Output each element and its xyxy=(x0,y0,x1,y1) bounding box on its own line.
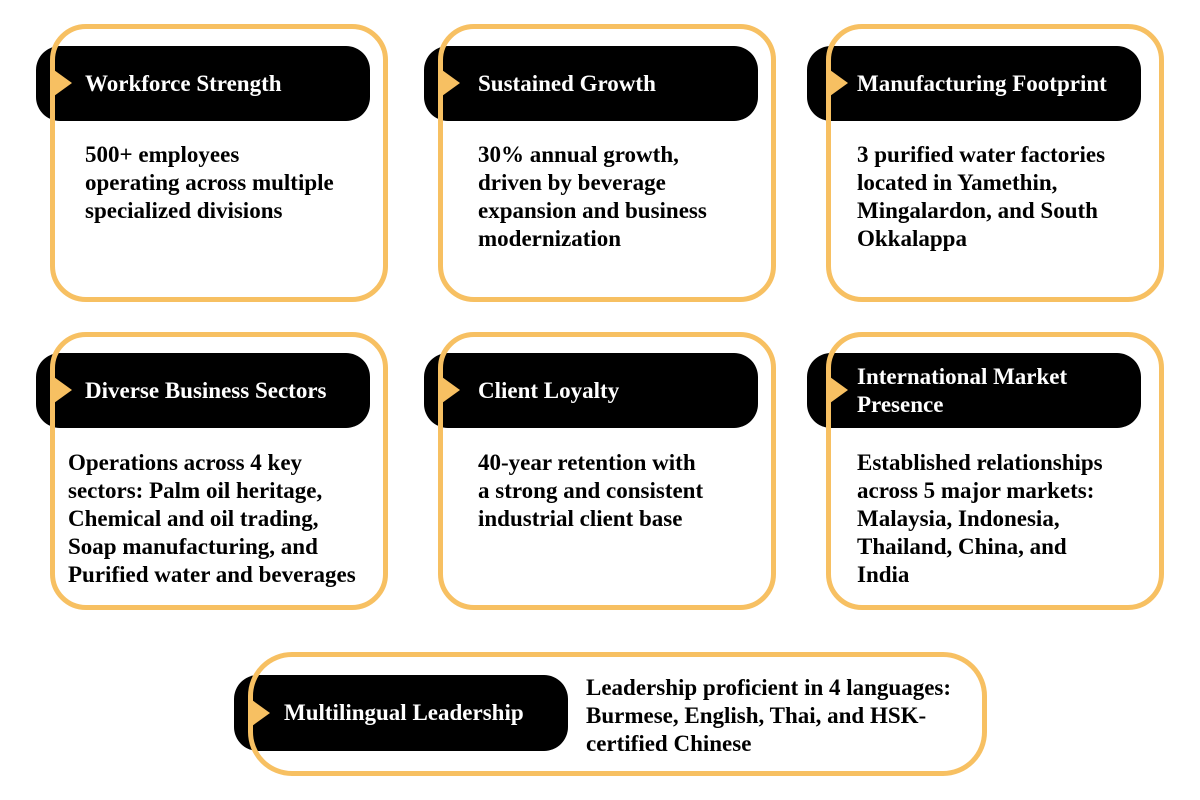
header: Diverse Business Sectors xyxy=(36,353,370,428)
text: markets: Thailand, China, and xyxy=(857,534,1067,559)
icon: notch xyxy=(54,377,72,403)
icon: notch xyxy=(830,70,848,96)
icon: notch xyxy=(442,377,460,403)
text: markets: India xyxy=(857,562,909,587)
text: markets xyxy=(857,450,1103,587)
border xyxy=(248,652,987,776)
text: workforce: 500+ employees xyxy=(85,142,239,167)
icon: notch xyxy=(830,377,848,403)
text: sectors: Purified water and beverages xyxy=(68,562,356,587)
card: Manufacturing Footprint xyxy=(807,24,1164,302)
text: sectors: Operations across 4 key xyxy=(68,450,302,475)
text: growth xyxy=(478,142,707,251)
border xyxy=(50,24,388,302)
text: growth: driven by beverage xyxy=(478,170,666,195)
card: Client Loyalty xyxy=(424,332,776,610)
text: factories: Mingalardon, and South xyxy=(857,198,1098,223)
header: International Market Presence xyxy=(807,353,1141,428)
border xyxy=(826,332,1164,610)
header: International Market Presence: Presence xyxy=(857,392,943,416)
header: Workforce Strength xyxy=(36,46,370,121)
icon: notch xyxy=(442,70,460,96)
text: loyalty: a strong and consistent xyxy=(478,478,703,503)
header: Sustained Growth xyxy=(424,46,758,121)
header: Manufacturing Footprint xyxy=(807,46,1141,121)
header: Multilingual Leadership xyxy=(234,675,568,751)
text: workforce: operating across multiple xyxy=(85,170,334,195)
text: sectors: sectors: Palm oil heritage, xyxy=(68,478,322,503)
header: Sustained Growth: Sustained Growth xyxy=(478,70,656,96)
header: Client Loyalty: Client Loyalty xyxy=(478,378,619,402)
text: sectors: Soap manufacturing, and xyxy=(68,534,318,559)
text: sectors xyxy=(68,450,356,587)
header: Diverse Business Sectors: Diverse Business Sectors xyxy=(85,378,326,402)
text: markets: Established relationships xyxy=(857,450,1103,475)
text: sectors: Chemical and oil trading, xyxy=(68,506,318,531)
text: markets: Malaysia, Indonesia, xyxy=(857,506,1060,531)
text: growth: modernization xyxy=(478,226,621,251)
text: languages: Leadership proficient in 4 languages: xyxy=(586,675,951,700)
text: factories: located in Yamethin, xyxy=(857,170,1057,195)
text: markets: across 5 major markets: xyxy=(857,478,1094,503)
text: loyalty xyxy=(478,450,704,531)
border xyxy=(50,332,388,610)
header: International Market Presence: International Market xyxy=(857,364,1067,388)
border xyxy=(826,24,1164,302)
card: Diverse Business Sectors xyxy=(36,332,388,610)
text: growth: expansion and business xyxy=(478,198,707,223)
icon: notch xyxy=(54,70,72,96)
card: Sustained Growth xyxy=(424,24,776,302)
header: Client Loyalty xyxy=(424,353,758,428)
text: loyalty: 40-year retention with xyxy=(478,450,696,475)
header: Multilingual Leadership: Multilingual Leadership xyxy=(284,700,524,725)
text: languages: Burmese, English, Thai, and HSK- xyxy=(586,703,926,728)
header: Manufacturing Footprint: Manufacturing Footprint xyxy=(857,70,1107,96)
text: factories: Okkalappa xyxy=(857,226,967,251)
text: workforce xyxy=(85,142,334,223)
card: International Market Presence xyxy=(807,332,1164,610)
card: Multilingual Leadership xyxy=(234,652,987,776)
text: loyalty: industrial client base xyxy=(478,506,682,531)
text: growth: 30% annual growth, xyxy=(478,142,679,167)
text: factories: 3 purified water factories xyxy=(857,142,1105,167)
border xyxy=(438,332,776,610)
text: factories xyxy=(857,142,1105,251)
text: languages: certified Chinese xyxy=(586,731,751,756)
text: languages xyxy=(586,675,951,756)
icon: notch xyxy=(252,700,270,726)
card: Workforce Strength xyxy=(36,24,388,302)
border xyxy=(438,24,776,302)
text: workforce: specialized divisions xyxy=(85,198,282,223)
header: Workforce Strength: Workforce Strength xyxy=(85,70,282,96)
